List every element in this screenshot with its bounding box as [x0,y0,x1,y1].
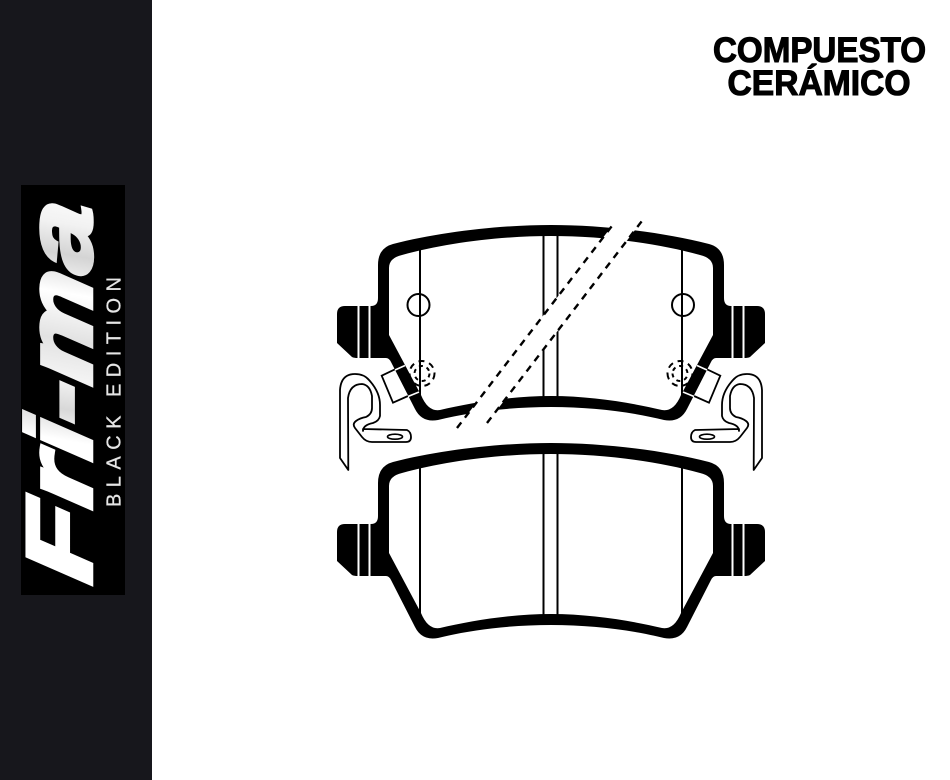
logo wordmark: Fri-ma [8,192,111,588]
left clip and sensor assembly [340,361,434,470]
logo: Fri-ma Black Edition [8,185,126,595]
right clip and sensor assembly [668,361,762,470]
icon: right wear sensor circle [672,294,694,316]
spring clip [340,374,411,470]
dashed break lines [457,217,645,428]
white break band across upper pad [457,217,645,428]
diagram: upper brake pad [337,225,765,421]
panel: dark sidebar [0,0,152,780]
dashed rivet [410,361,434,386]
tab edges across pad [395,366,419,396]
icon: left wear sensor circle [408,294,430,316]
diagram: lower brake pad [337,443,765,639]
logo tagline: BLACK EDITION [104,277,126,507]
backing tab [382,365,408,403]
heading: compuesto ceramico [713,31,926,103]
heading: compuesto ceramico: CERÁMICO [728,63,910,103]
clip slot [388,434,402,439]
heading: compuesto ceramico: COMPUESTO [713,31,926,70]
